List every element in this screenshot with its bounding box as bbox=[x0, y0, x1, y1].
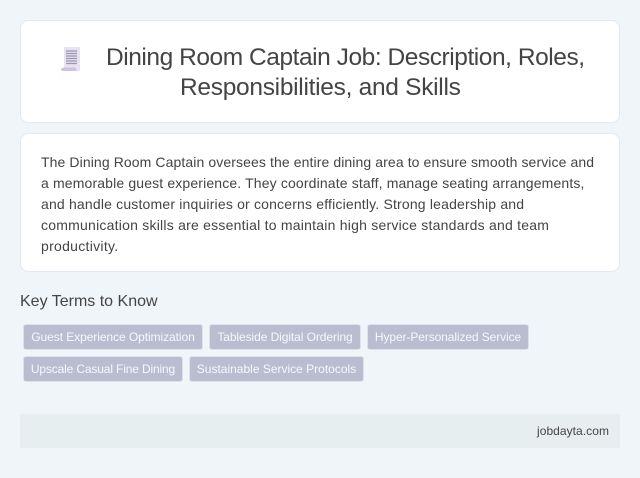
tag: Tableside Digital Ordering bbox=[217, 330, 353, 344]
description text: communication skills are essential to maintain high service standards and team bbox=[41, 217, 549, 233]
description text: The Dining Room Captain oversees the entire dining area to ensure smooth service and bbox=[41, 154, 594, 170]
header panel bbox=[20, 20, 620, 123]
heading: key terms: Key Terms to Know bbox=[20, 293, 158, 310]
tag bbox=[189, 356, 364, 382]
description text: a memorable guest experience. They coordinate staff, manage seating arrangements, bbox=[41, 175, 585, 191]
icon: document scroll bbox=[61, 47, 80, 71]
description text: and handle customer inquiries or concerns efficiently. Strong leadership and bbox=[41, 196, 524, 212]
tag: Sustainable Service Protocols bbox=[197, 362, 356, 376]
tag: Hyper-Personalized Service bbox=[375, 330, 521, 344]
tag list bbox=[23, 324, 529, 382]
footer text: jobdayta.com bbox=[537, 424, 609, 438]
description panel bbox=[20, 133, 620, 272]
tag bbox=[209, 324, 361, 350]
tag bbox=[23, 356, 183, 382]
tag bbox=[367, 324, 529, 350]
description text: productivity. bbox=[41, 238, 118, 254]
footer bbox=[20, 414, 620, 448]
title bbox=[106, 44, 585, 101]
description text bbox=[41, 154, 594, 254]
tag bbox=[23, 324, 203, 350]
title: Dining Room Captain Job: Description, Roles, bbox=[106, 44, 585, 71]
tag: Guest Experience Optimization bbox=[31, 330, 195, 344]
title: Responsibilities, and Skills bbox=[180, 74, 461, 101]
tag: Upscale Casual Fine Dining bbox=[31, 362, 175, 376]
